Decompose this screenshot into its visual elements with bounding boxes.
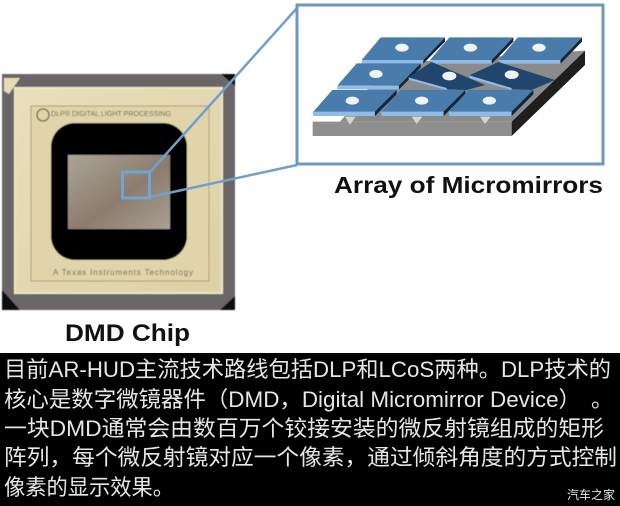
- description text: 像素的显示效果。: [4, 475, 174, 500]
- description text: 。: [591, 387, 613, 412]
- highlighted region on chip: [122, 172, 150, 198]
- mirrors: middle row: [337, 62, 555, 90]
- description panel: [0, 353, 620, 506]
- description text: 目前AR-HUD主流技术路线包括DLP和LCoS两种。DLP技术的: [4, 357, 611, 382]
- chip label: bottom: A Texas Instruments Technology: [53, 268, 193, 277]
- DMD chip photo: [2, 74, 235, 310]
- description text: 核心是数字微镜器件（DMD，Digital Micromirror Device）: [4, 387, 581, 412]
- mirror hinges: [345, 117, 491, 125]
- watermark: 汽车之家: [567, 487, 615, 502]
- zoom connector lines: [150, 8, 297, 197]
- chip label: top: DLP® DIGITAL LIGHT PROCESSING: [51, 109, 171, 118]
- description text: 一块DMD通常会由数百万个铰接安装的微反射镜组成的矩形: [4, 416, 604, 441]
- chip window: [51, 123, 187, 260]
- mirrors: back row: [362, 37, 582, 64]
- chip label: top: [37, 109, 171, 121]
- description text: [4, 357, 617, 500]
- caption: DMD chip: DMD Chip: [65, 320, 190, 347]
- mirrors: front row: [313, 90, 533, 116]
- micromirror array illustration: [313, 37, 585, 136]
- magnified view frame: [297, 5, 603, 164]
- description text: 阵列，每个微反射镜对应一个像素，通过倾斜角度的方式控制: [4, 445, 617, 470]
- substrate: [313, 51, 585, 136]
- caption: array of micromirrors: Array of Micromirrors: [334, 172, 603, 198]
